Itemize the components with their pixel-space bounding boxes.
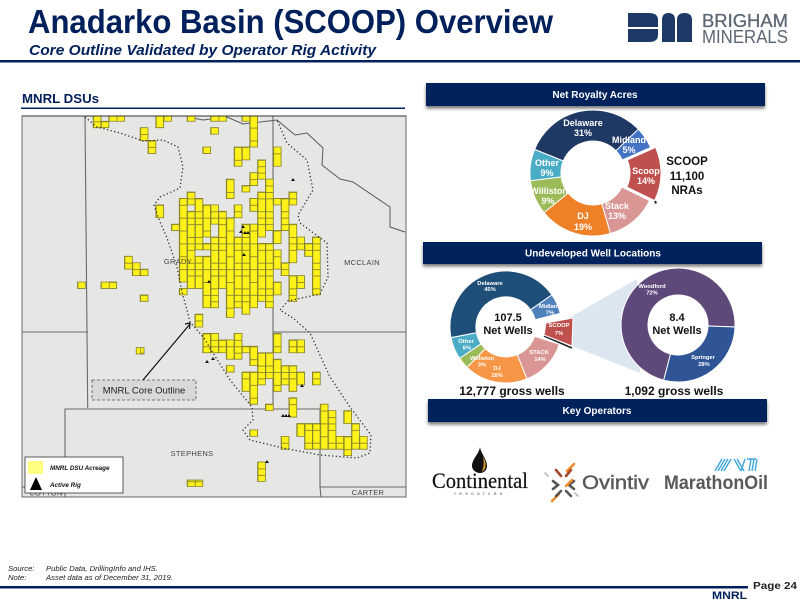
donut chart: SCOOP well breakout [621, 268, 735, 382]
callout: SCOOP 11,100 NRAs: NRAs [671, 185, 703, 197]
subtitle: Core Outline Validated by Operator Rig Activity [29, 42, 377, 59]
donut chart: net royalty acres [530, 110, 661, 236]
callout: SCOOP 11,100 NRAs: 11,100 [670, 171, 704, 183]
donut labels: undeveloped well locations [458, 281, 570, 379]
logo: Marathon Oil [664, 459, 768, 494]
donut labels: undeveloped well locations: Delaware [477, 281, 503, 287]
donut labels: undeveloped well locations: 6% [463, 346, 471, 352]
connector: SCOOP breakout [565, 279, 640, 373]
donut labels: net royalty acres: DJ [577, 211, 589, 221]
footnotes: Public Data, DrillingInfo and IHS. [46, 564, 158, 573]
donut labels: net royalty acres: Williston [530, 186, 568, 196]
header: Undeveloped Well Locations: Undeveloped Well Locations [525, 248, 661, 260]
center label: 8.4 Net Wells: Net Wells [652, 325, 702, 337]
label: 1,092 gross wells: 1,092 gross wells [625, 384, 724, 398]
donut labels: SCOOP breakout: Woodford [638, 284, 666, 290]
donut labels: undeveloped well locations: 45% [484, 287, 496, 293]
donut labels: net royalty acres: 13% [608, 211, 626, 221]
footnotes: Source: [8, 564, 34, 573]
footnotes [8, 564, 173, 582]
donut labels: net royalty acres: Other [535, 158, 559, 168]
label: 12,777 gross wells: 12,777 gross wells [459, 384, 565, 398]
donut labels: net royalty acres: 5% [622, 145, 636, 155]
logo: Ovintiv [545, 464, 649, 501]
logo: Continental Resources: Continental [432, 468, 528, 493]
legend [25, 457, 123, 493]
center label: 8.4 Net Wells: 8.4 [669, 312, 686, 324]
donut labels: SCOOP breakout: 72% [646, 290, 658, 296]
county labels: MCCLAIN [344, 258, 380, 267]
donut labels: net royalty acres: Midland [612, 135, 646, 145]
legend: MNRL DSU Acreage [50, 465, 110, 472]
donut labels: undeveloped well locations: DJ [493, 366, 501, 372]
donut labels: undeveloped well locations: SCOOP [549, 323, 570, 329]
donut labels: undeveloped well locations: Other [458, 339, 474, 345]
donut labels: undeveloped well locations: 7% [546, 310, 554, 316]
donut labels: SCOOP breakout: 28% [698, 362, 710, 368]
county labels: CARTER [352, 488, 385, 497]
map panel [22, 115, 406, 498]
logo: Ovintiv: Ovintiv [582, 472, 649, 494]
footnotes: Note: [8, 573, 26, 582]
logo: Marathon Oil: MarathonOil [664, 473, 768, 494]
donut labels: net royalty acres: 31% [574, 128, 592, 138]
donut labels: SCOOP breakout: Springer [691, 355, 716, 361]
donut labels: undeveloped well locations: 14% [534, 357, 546, 363]
logo: Continental Resources: resources [454, 491, 506, 496]
donut labels: undeveloped well locations: STACK [529, 350, 550, 356]
donut labels: net royalty acres: Stack [605, 201, 630, 211]
logo: Continental Resources [432, 447, 528, 496]
center label: 107.5 Net Wells: 107.5 [494, 312, 522, 324]
header: Net Royalty Acres: Net Royalty Acres [552, 90, 638, 101]
river [188, 117, 405, 232]
header: Key Operators [428, 399, 767, 422]
donut labels: net royalty acres: 14% [637, 176, 655, 186]
donut labels: net royalty acres [530, 118, 660, 232]
donut labels: undeveloped well locations: 3% [478, 362, 486, 368]
callout: SCOOP 11,100 NRAs: SCOOP [666, 156, 708, 168]
core outline [85, 117, 371, 458]
county boundaries [22, 116, 406, 497]
county labels: GRADY [164, 257, 192, 266]
donut labels: net royalty acres: Scoop [632, 166, 660, 176]
donut labels: undeveloped well locations: Williston [470, 356, 495, 362]
donut labels: net royalty acres: 19% [574, 222, 592, 232]
donut labels: net royalty acres: 9% [540, 168, 554, 178]
logo: Brigham Minerals: BRIGHAM [702, 11, 788, 31]
active rigs [205, 178, 304, 463]
center label: 107.5 Net Wells: Net Wells [483, 325, 533, 337]
title: Anadarko Basin (SCOOP) Overview [28, 3, 553, 40]
county labels: STEPHENS [171, 449, 213, 458]
logo: Brigham Minerals [628, 11, 788, 47]
page number: Page 24 [753, 581, 797, 592]
callout: MNRL Core Outline: MNRL Core Outline [103, 386, 185, 396]
header: Net Royalty Acres [426, 83, 765, 106]
header: Key Operators: Key Operators [563, 406, 632, 417]
heading: MNRL DSUs: MNRL DSUs [22, 91, 99, 106]
donut labels: undeveloped well locations: 7% [555, 331, 563, 337]
header: Undeveloped Well Locations [423, 242, 762, 264]
donut labels: net royalty acres: Delaware [563, 118, 603, 128]
callout: MNRL Core Outline [92, 380, 196, 400]
center label: 107.5 Net Wells [483, 312, 533, 337]
donut labels: undeveloped well locations: Midland [539, 304, 561, 310]
legend: Active Rig [49, 482, 81, 489]
logo: Brigham Minerals: MINERALS [702, 27, 788, 47]
donut labels: SCOOP breakout [638, 284, 716, 368]
county labels: COTTON [29, 488, 63, 498]
donut chart: undeveloped well locations [450, 271, 573, 383]
DSU acreage cells [78, 115, 367, 486]
county labels [29, 257, 385, 498]
donut labels: net royalty acres: 9% [541, 196, 555, 206]
arrow to core outline [143, 323, 190, 380]
donut labels: undeveloped well locations: 16% [491, 373, 503, 379]
center label: 8.4 Net Wells [652, 312, 702, 337]
footnotes: Asset data as of December 31, 2019. [45, 573, 173, 582]
callout: SCOOP 11,100 NRAs [666, 156, 708, 197]
